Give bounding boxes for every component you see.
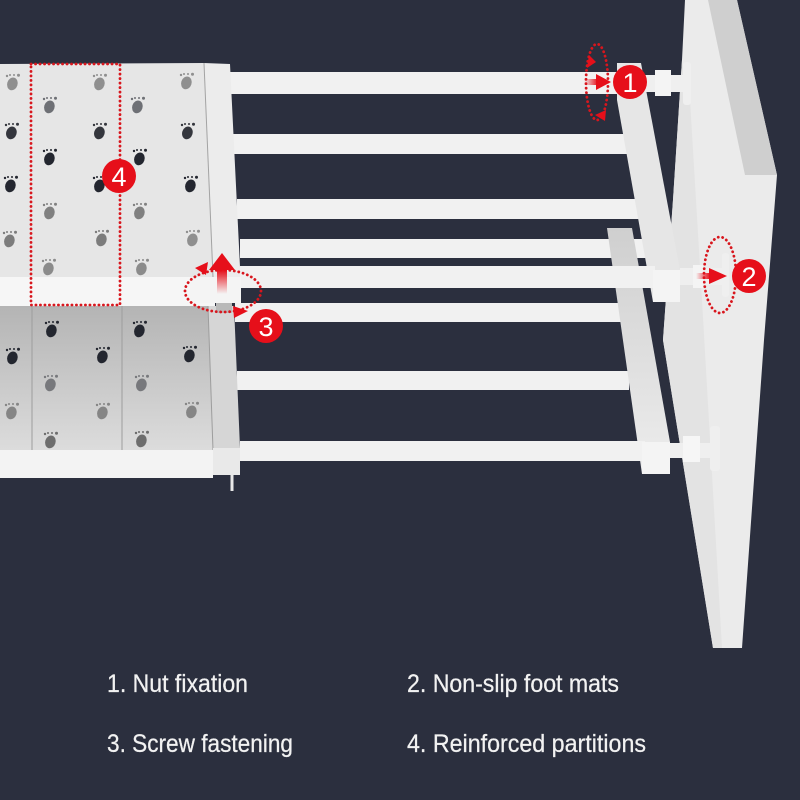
caption: reinforced partitions: 4. Reinforced partitions — [407, 730, 646, 758]
top shelf foot mats — [2, 73, 200, 277]
front telescopic rods — [240, 266, 680, 474]
caption: non-slip foot mats: 2. Non-slip foot mats — [407, 670, 619, 698]
telescopic rods behind the brackets — [230, 72, 648, 390]
front lower bracket — [607, 228, 670, 474]
callout 1: nut fixation: 1 — [622, 68, 638, 98]
wall panel — [663, 0, 777, 648]
rear bracket — [617, 63, 680, 302]
top shelf — [0, 63, 241, 313]
fixing nuts — [640, 62, 729, 471]
lower shelf foot mats — [4, 321, 199, 450]
callout 4: reinforced partition — [31, 64, 136, 305]
caption: screw fastening: 3. Screw fastening — [107, 730, 293, 758]
callout 3: screw fastening: 3 — [258, 312, 274, 342]
callout 2: non-slip foot mat: 2 — [741, 262, 757, 292]
caption: nut fixation: 1. Nut fixation — [107, 670, 248, 698]
callout 3: screw fastening — [185, 253, 283, 343]
callout 1: nut fixation — [584, 44, 647, 121]
lower shelf — [0, 306, 240, 491]
callout 2: non-slip foot mat — [696, 237, 766, 313]
callout 4: reinforced partition: 4 — [111, 162, 127, 192]
